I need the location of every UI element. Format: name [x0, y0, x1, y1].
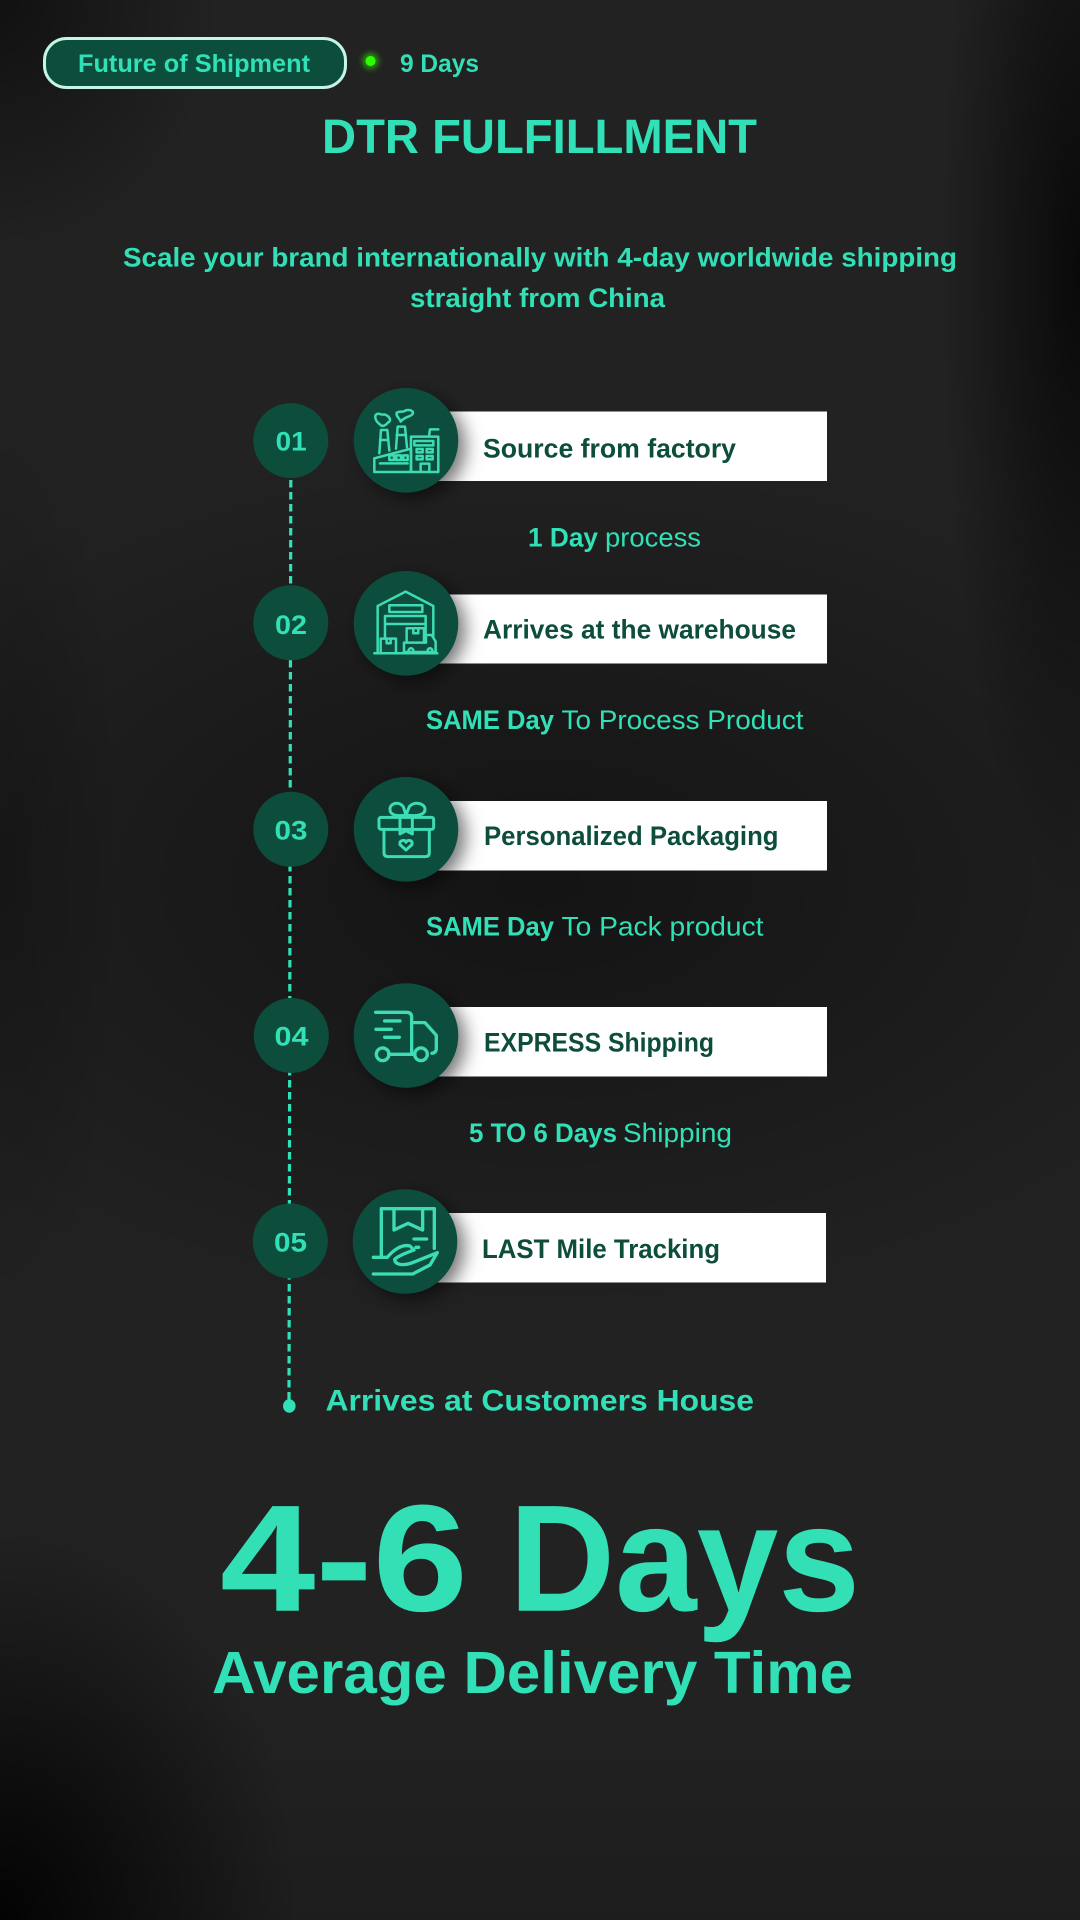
step 1 number: [253, 403, 328, 478]
step 4 bar: [430, 1007, 827, 1076]
step 2 number: 02: [275, 610, 307, 640]
step 3 duration: SAME Day: [426, 912, 554, 942]
icon: gift box: [354, 777, 458, 882]
step 5: [253, 1189, 826, 1294]
step 1 bar: [430, 412, 827, 481]
header pill: Future of Shipment: [78, 50, 311, 78]
big delivery figure: [220, 1474, 860, 1644]
step 3 bar: Personalized Packaging: [484, 821, 778, 851]
step 2 bar: Arrives at the warehouse: [483, 615, 796, 645]
step 1: [253, 388, 827, 493]
step 3 number: 03: [274, 816, 308, 846]
icon: warehouse: [354, 571, 458, 676]
subtitle: [123, 242, 957, 313]
subtitle: straight from China: [410, 283, 666, 313]
icon: factory: [354, 388, 458, 493]
timeline end dot: [283, 1399, 296, 1413]
status dot: [362, 53, 378, 69]
icon: delivery truck: [354, 983, 458, 1088]
step 4: [254, 983, 827, 1088]
title: DTR FULFILLMENT: [322, 111, 757, 164]
step 1 number: 01: [276, 427, 307, 457]
step 5 number: [253, 1204, 328, 1278]
icon: hand holding parcel: [353, 1189, 457, 1294]
big delivery figure: 4-6: [220, 1474, 468, 1644]
step 1 duration: 1 Day: [528, 523, 598, 553]
step 4 number: 04: [274, 1021, 308, 1051]
step 4 duration: [469, 1118, 732, 1148]
big delivery figure: Days: [509, 1474, 860, 1644]
final arrival label: Arrives at Customers House: [326, 1385, 754, 1418]
step 2 duration: To Process Product: [562, 705, 804, 735]
step 3 bar: [430, 801, 827, 870]
step 2 duration: [426, 705, 804, 735]
timeline dashed line: [289, 480, 291, 1400]
step 4 duration: 5 TO 6 Days: [469, 1118, 617, 1148]
step 1 duration: [528, 523, 701, 553]
step 3 duration: To Pack product: [562, 912, 764, 942]
subtitle: Scale your brand internationally with 4-day worldwide shipping: [123, 242, 957, 272]
step 5 bar: [430, 1213, 826, 1282]
step 2 bar: [430, 594, 827, 664]
step 3 number: [253, 792, 328, 867]
step 3: [253, 777, 827, 882]
step 5 bar: LAST Mile Tracking: [482, 1234, 720, 1264]
step 3 duration: [426, 912, 764, 942]
step 2 number: [253, 585, 328, 660]
duration label: 9 Days: [400, 50, 479, 78]
step 4 number: [254, 998, 329, 1073]
step 2: [253, 571, 827, 676]
step 1 bar: Source from factory: [483, 433, 736, 463]
step 4 bar: EXPRESS Shipping: [484, 1028, 714, 1058]
delivery caption: Average Delivery Time: [212, 1640, 853, 1706]
step 4 duration: Shipping: [623, 1118, 732, 1148]
step 5 number: 05: [274, 1228, 307, 1258]
step 1 duration: process: [605, 523, 701, 553]
header pill: [44, 38, 346, 88]
step 2 duration: SAME Day: [426, 705, 554, 735]
